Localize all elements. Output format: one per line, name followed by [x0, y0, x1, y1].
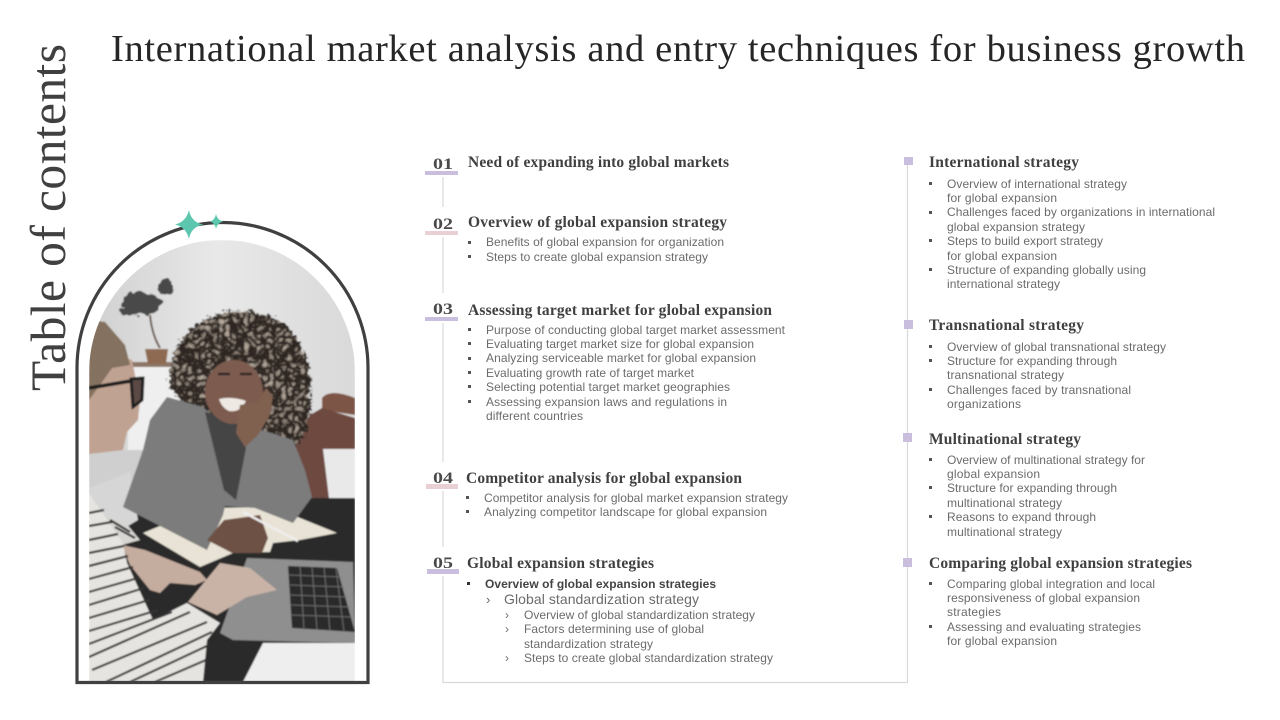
list: international strategy	[947, 277, 1060, 291]
heading: Comparing global expansion strategies	[929, 555, 1192, 572]
striped sleeve	[116, 525, 141, 546]
list: multinational strategy	[947, 525, 1062, 539]
list 03: different countries	[486, 409, 583, 423]
dark top under blazer	[205, 412, 246, 500]
list 05: ›	[505, 622, 509, 636]
striped shirt	[89, 493, 220, 682]
list 05: Overview of global expansion strategies	[485, 577, 716, 591]
list: Challenges faced by organizations in international	[947, 205, 1215, 219]
paper	[243, 643, 355, 682]
list	[929, 177, 1215, 291]
list: transnational strategy	[947, 368, 1064, 382]
notebook	[143, 507, 337, 567]
list 05: Global standardization strategy	[504, 591, 699, 607]
number 02: 02	[433, 216, 453, 233]
left woman's head	[89, 358, 140, 454]
list 04: Analyzing competitor landscape for global expansion	[484, 505, 767, 519]
section 02	[425, 214, 727, 264]
list 03: Purpose of conducting global target market assessment	[486, 323, 786, 337]
list 04	[466, 491, 788, 519]
list 02	[468, 235, 724, 264]
title: International market analysis and entry techniques for business growth	[111, 28, 1245, 70]
heading: International strategy	[929, 154, 1079, 171]
hand on cheek	[236, 388, 273, 447]
list 05: Steps to create global standardization strategy	[524, 651, 773, 665]
plant	[121, 280, 174, 316]
timeline connector	[443, 157, 908, 682]
hair	[167, 308, 308, 448]
list 05: standardization strategy	[524, 637, 653, 651]
list 05: Factors determining use of global	[524, 622, 704, 636]
list: Reasons to expand through	[947, 510, 1096, 524]
heading: Multinational strategy	[929, 431, 1081, 448]
section 01	[425, 154, 729, 175]
section: Comparing global expansion strategies	[903, 555, 1192, 648]
list 02: Benefits of global expansion for organization	[486, 235, 724, 249]
heading 03: Assessing target market for global expansion	[468, 302, 772, 319]
chair	[323, 449, 355, 498]
list: global expansion	[947, 467, 1040, 481]
list 03: Evaluating growth rate of target market	[486, 366, 695, 380]
list 03: Selecting potential target market geographies	[486, 380, 730, 394]
list	[929, 577, 1155, 648]
arm and hands of the left woman	[122, 545, 207, 593]
list 05: Overview of global standardization strategy	[524, 608, 755, 622]
number 04: 04	[433, 470, 453, 487]
list	[929, 340, 1166, 411]
face	[205, 360, 263, 424]
heading 05: Global expansion strategies	[467, 555, 654, 572]
list: Overview of multinational strategy for	[947, 453, 1145, 467]
number 05: 05	[433, 555, 453, 572]
vertical heading: Table of contents: Table of contents	[21, 44, 76, 391]
table	[122, 498, 355, 681]
heading 04: Competitor analysis for global expansion	[466, 470, 742, 487]
arch photo frame	[77, 222, 368, 682]
list: responsiveness of global expansion	[947, 591, 1140, 605]
list: Comparing global integration and local	[947, 577, 1155, 591]
number 01: 01	[433, 156, 453, 173]
list: Structure for expanding through	[947, 481, 1117, 495]
list: Overview of international strategy	[947, 177, 1127, 191]
list: for global expansion	[947, 634, 1057, 648]
list: Challenges faced by transnational	[947, 383, 1131, 397]
arch outline	[77, 222, 368, 682]
section 05	[427, 555, 773, 665]
list: global expansion strategy	[947, 220, 1085, 234]
list 03: Assessing expansion laws and regulations in	[486, 395, 727, 409]
laptop	[220, 558, 355, 643]
list: Structure of expanding globally using	[947, 263, 1146, 277]
list 05: ›	[486, 592, 490, 607]
number 03: 03	[433, 301, 453, 318]
section 04	[426, 470, 788, 519]
list	[929, 453, 1145, 539]
section: Transnational strategy	[904, 317, 1166, 411]
list: Overview of global transnational strategy	[947, 340, 1166, 354]
list: organizations	[947, 397, 1021, 411]
section: Multinational strategy	[903, 431, 1145, 539]
blazer	[123, 397, 312, 550]
list 03: Evaluating target market size for global expansion	[486, 337, 754, 351]
list: Structure for expanding through	[947, 354, 1117, 368]
sofa	[322, 393, 355, 415]
list 02: Steps to create global expansion strategy	[486, 250, 708, 264]
chair back left	[92, 496, 140, 526]
list: strategies	[947, 605, 1001, 619]
list: Steps to build export strategy	[947, 234, 1103, 248]
list 05: ›	[505, 651, 509, 665]
icon: teal sparkles	[175, 210, 223, 239]
list 03: Analyzing serviceable market for global expansion	[486, 351, 756, 365]
list: Assessing and evaluating strategies	[947, 620, 1141, 634]
heading 01: Need of expanding into global markets	[468, 154, 729, 171]
list: multinational strategy	[947, 496, 1062, 510]
list: for global expansion	[947, 191, 1057, 205]
heading: Transnational strategy	[929, 317, 1084, 334]
section: International strategy	[904, 154, 1215, 291]
heading 02: Overview of global expansion strategy	[468, 214, 727, 231]
hand with pen	[207, 515, 268, 553]
section 03	[425, 301, 786, 423]
list 03	[468, 323, 786, 423]
list 05: ›	[505, 608, 509, 622]
list 04: Competitor analysis for global market expansion strategy	[484, 491, 788, 505]
list: for global expansion	[947, 249, 1057, 263]
list 05	[467, 577, 773, 665]
photo: two women at a table with a laptop	[89, 240, 355, 682]
